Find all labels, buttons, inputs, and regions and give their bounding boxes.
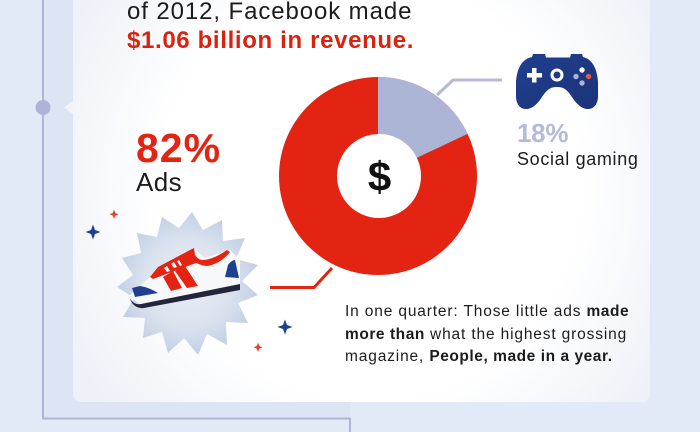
main panel	[64, 0, 650, 402]
sparkle: navy bottom	[278, 320, 292, 334]
headline text	[127, 0, 414, 54]
callout text: more than what the highest grossing	[345, 326, 627, 342]
callout text	[345, 303, 629, 365]
stat: 82% ads: 82%	[136, 125, 221, 171]
background band	[43, 0, 350, 418]
stat: 82% ads	[136, 125, 221, 197]
sparkle: red bottom	[254, 342, 262, 352]
timeline connector	[43, 0, 350, 432]
callout text: magazine, People, made in a year.	[345, 348, 613, 365]
leader line: social gaming	[437, 80, 502, 95]
stat: 18% social gaming: Social gaming	[517, 149, 639, 169]
donut chart	[279, 77, 477, 275]
callout text: In one quarter: Those little ads made	[345, 303, 629, 320]
stat: 82% ads: Ads	[136, 167, 182, 197]
stat: 18% social gaming	[517, 118, 639, 169]
icon: sneaker	[129, 248, 240, 308]
leader line: ads	[270, 268, 332, 288]
headline text: $1.06 billion in revenue.	[127, 27, 414, 54]
icon: game controller	[516, 54, 598, 109]
stat: 18% social gaming: 18%	[517, 118, 568, 148]
starburst	[117, 212, 258, 355]
sparkle: red top	[110, 210, 118, 219]
sparkle: navy top left	[86, 224, 100, 240]
timeline dot	[36, 100, 50, 115]
dollar sign: $	[368, 153, 391, 200]
